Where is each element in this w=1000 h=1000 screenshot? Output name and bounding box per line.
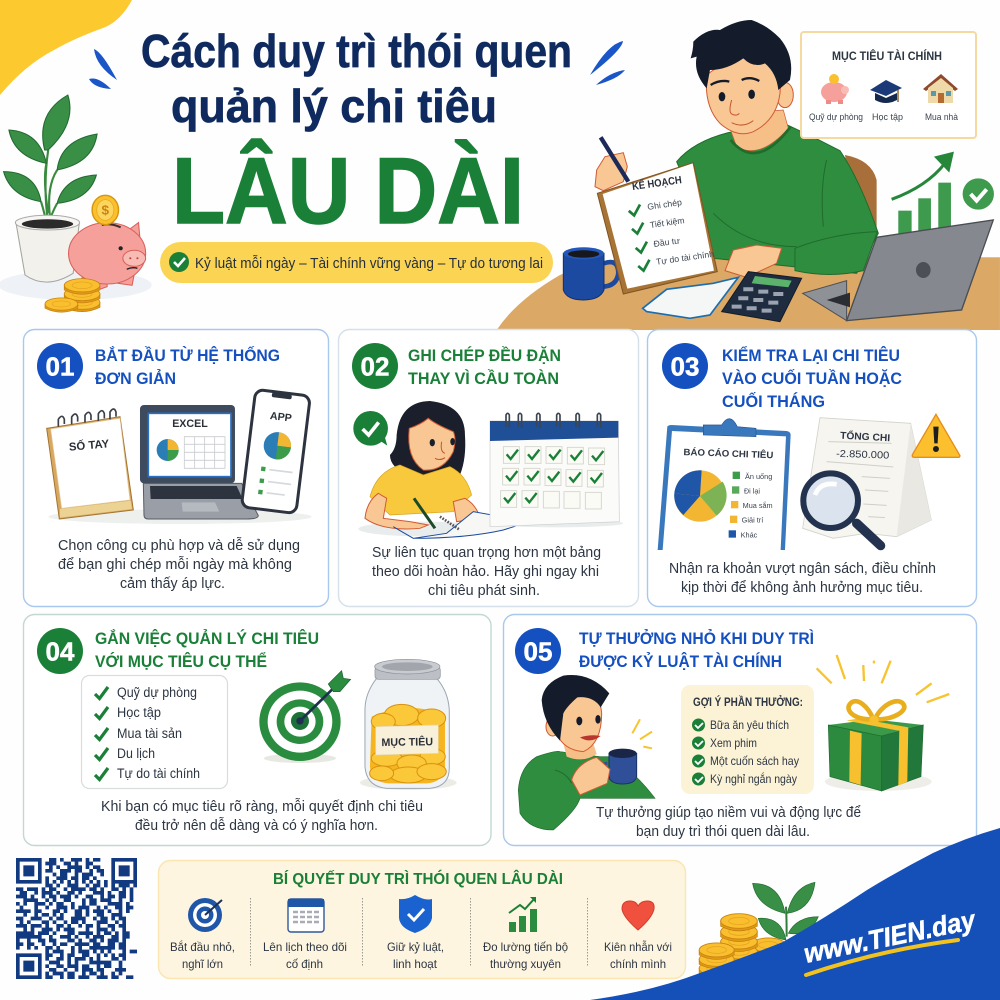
number 05: 05 <box>524 636 552 666</box>
tip labels <box>170 939 672 971</box>
icon: house <box>923 74 958 103</box>
text 01: Chọn công cụ phù hợp và dễ sử dụng <box>58 537 300 554</box>
illustration: desk, man planning, laptop <box>497 20 1000 330</box>
text 01: cảm thấy áp lực. <box>120 576 225 592</box>
illustration: plant, piggy bank and coins <box>0 95 152 312</box>
clipboard with plan <box>597 163 717 294</box>
calendar <box>490 413 623 527</box>
title <box>141 25 572 243</box>
heading 03: VÀO CUỐI TUẦN HOẶC <box>722 368 902 388</box>
heading 03 <box>722 346 902 411</box>
text 04: đều trở nên dễ dàng và có ý nghĩa hơn. <box>135 817 378 834</box>
tip labels: chính mình <box>610 957 666 971</box>
hand on book <box>725 245 782 277</box>
number 01 <box>37 343 83 389</box>
reward suggestions: Bữa ăn yêu thích <box>710 718 789 732</box>
heading 05: ĐƯỢC KỶ LUẬT TÀI CHÍNH <box>579 652 782 671</box>
panel: card 02 <box>338 330 638 606</box>
text 02: Sự liên tục quan trọng hơn một bảng <box>372 545 601 561</box>
receipt: -2.850.000 <box>836 449 890 462</box>
checklist box: Mua tài sản <box>117 726 182 741</box>
heading 02: THAY VÌ CẦU TOÀN <box>408 369 559 388</box>
panel: financial goals: Quỹ dự phòng <box>809 112 863 123</box>
text 02 <box>372 545 601 599</box>
checklist box: Tự do tài chính <box>117 766 200 781</box>
checklist box: Học tập <box>117 705 161 720</box>
QR code <box>16 860 137 977</box>
heading 04: VỚI MỤC TIÊU CỤ THỂ <box>95 652 267 671</box>
icon: target <box>188 898 222 932</box>
blue sparks right <box>590 41 625 85</box>
panel: financial goals: Học tập <box>872 112 903 123</box>
illustration: target and jar <box>259 659 457 790</box>
panel: long-term tips <box>158 860 686 978</box>
legend: Đi lại <box>744 486 760 495</box>
title: LÂU DÀI <box>172 137 524 243</box>
panel: card 01 <box>24 330 328 606</box>
reward suggestions: GỢI Ý PHẦN THƯỞNG: <box>693 696 803 709</box>
illustration: plant, piggy bank and coins: $ <box>102 203 110 218</box>
panel: card 03 <box>648 330 976 606</box>
number 05 <box>515 628 561 674</box>
illustration: coins and sprout <box>699 882 818 978</box>
checklist box: Quỹ dự phòng <box>117 685 197 700</box>
laptop excel: EXCEL <box>172 418 208 430</box>
tip labels: Kiên nhẫn với <box>604 939 672 954</box>
text 04 <box>101 798 423 834</box>
reward suggestions <box>681 685 814 794</box>
heading 03: KIỂM TRA LẠI CHI TIÊU <box>722 346 900 365</box>
title: quản lý chi tiêu <box>171 80 497 132</box>
number 04 <box>37 628 83 674</box>
brand: www.TIEN.day: www.TIEN.day <box>801 904 980 969</box>
reward suggestions: Kỳ nghỉ ngắn ngày <box>710 771 797 786</box>
laptop <box>803 220 993 321</box>
panel: card 04 <box>24 614 491 846</box>
panel: card 05 <box>504 614 976 846</box>
clipboard with plan: Đầu tư <box>653 235 681 249</box>
blue corner <box>590 828 1000 1000</box>
receipt: TỔNG CHI <box>840 429 891 444</box>
icon: graduation cap <box>870 80 902 103</box>
hand and pen <box>595 137 628 191</box>
receipt <box>803 418 931 538</box>
clipboard with plan: Tiết kiệm <box>649 215 685 230</box>
heading 05: TỰ THƯỞNG NHỎ KHI DUY TRÌ <box>579 629 814 648</box>
panel: financial goals <box>801 32 976 138</box>
icon: growth chart <box>509 897 537 932</box>
legend: Ăn uống <box>745 472 772 481</box>
icon: piggy <box>821 74 849 104</box>
text 05: Tự thưởng giúp tạo niềm vui và động lực để <box>596 805 861 821</box>
legend: Mua sắm <box>743 501 773 510</box>
panel: financial goals: MỤC TIÊU TÀI CHÍNH <box>832 50 942 63</box>
tip labels: Bắt đầu nhỏ, <box>170 939 235 954</box>
text 03: Nhận ra khoản vượt ngân sách, điều chỉnh <box>669 561 936 577</box>
icon: calendar <box>288 899 324 932</box>
phone <box>241 389 310 514</box>
number 03: 03 <box>671 352 699 382</box>
man <box>677 20 878 274</box>
text 02: theo dõi hoàn hảo. Hãy ghi ngay khi <box>372 564 599 580</box>
clipboard report <box>658 419 791 550</box>
phone: APP <box>269 410 292 425</box>
tip labels: Lên lịch theo dõi <box>263 940 347 954</box>
heading 01: ĐƠN GIẢN <box>95 369 176 388</box>
magnifier <box>803 473 881 546</box>
growth chart and arrow <box>892 152 994 234</box>
heading 04 <box>95 629 319 671</box>
blue sparks left <box>89 49 117 89</box>
jar with coins: MỤC TIÊU <box>381 735 433 749</box>
text 01 <box>58 537 300 592</box>
panel: financial goals: Mua nhà <box>925 112 959 123</box>
target <box>259 671 351 763</box>
notebook: SỐ TAY <box>68 436 110 454</box>
illustration: gift <box>817 655 949 791</box>
text 03 <box>669 561 936 596</box>
panel: long-term tips: BÍ QUYẾT DUY TRÌ THÓI QUEN LÂU DÀI <box>273 869 563 888</box>
legend: Khác <box>741 530 757 539</box>
title: Cách duy trì thói quen <box>141 25 572 77</box>
book and pen <box>393 498 530 538</box>
clipboard with plan: Ghi chép <box>647 197 683 212</box>
reward suggestions: Một cuốn sách hay <box>710 754 799 768</box>
tagline pill: Kỷ luật mỗi ngày – Tài chính vững vàng – Tự do tương lai <box>195 255 543 272</box>
text 05: bạn duy trì thói quen dài lâu. <box>636 824 810 840</box>
text 01: để bạn ghi chép mỗi ngày mà không <box>58 556 292 573</box>
checklist box: Du lịch <box>117 746 155 761</box>
number 04: 04 <box>46 636 75 666</box>
number 03 <box>662 343 708 389</box>
heading 03: CUỐI THÁNG <box>722 391 825 411</box>
clipboard with plan: KẾ HOẠCH <box>631 173 683 193</box>
tip labels: nghĩ lớn <box>182 957 223 971</box>
notebook <box>47 409 133 519</box>
desk <box>497 257 1000 330</box>
heading 01: BẮT ĐẦU TỪ HỆ THỐNG <box>95 345 280 365</box>
text 04: Khi bạn có mục tiêu rõ ràng, mỗi quyết định chi tiêu <box>101 798 423 815</box>
legend <box>729 472 773 539</box>
number 02 <box>352 343 398 389</box>
illustration: report, receipt, magnifier <box>658 414 960 550</box>
legend: Giải trí <box>742 516 764 525</box>
jar with coins <box>360 659 457 790</box>
icon: heart <box>622 901 654 930</box>
text 03: kịp thời để không ảnh hưởng mục tiêu. <box>681 580 923 596</box>
tip labels: Giữ kỷ luật, <box>387 940 444 954</box>
number 02: 02 <box>361 352 389 382</box>
tip labels: thường xuyên <box>490 957 561 971</box>
heading 02 <box>408 346 561 388</box>
tip labels: cố định <box>286 957 323 971</box>
text 05 <box>596 805 861 840</box>
clipboard report: BÁO CÁO CHI TIÊU <box>683 446 774 460</box>
illustration: girl writing <box>353 401 530 538</box>
icon: shield <box>399 895 432 933</box>
check bubble <box>353 411 388 446</box>
illustration: man with mug <box>518 675 655 830</box>
illustration: notebook, laptop, phone <box>47 389 312 524</box>
open book <box>643 277 738 318</box>
clipboard with plan: Tự do tài chính <box>655 249 715 267</box>
number 01: 01 <box>46 352 74 382</box>
reward suggestions: Xem phim <box>710 736 757 750</box>
warning <box>912 414 960 457</box>
yellow corner blob <box>0 0 132 95</box>
calculator <box>722 272 802 322</box>
heading 01 <box>95 345 280 388</box>
mug <box>563 247 618 300</box>
heading 02: GHI CHÉP ĐỀU ĐẶN <box>408 346 561 365</box>
heading 05 <box>579 629 814 671</box>
laptop excel <box>140 405 258 519</box>
tagline pill <box>160 242 553 283</box>
tip labels: linh hoạt <box>393 957 438 971</box>
girl <box>365 401 480 529</box>
tip labels: Đo lường tiến bộ <box>483 940 568 954</box>
text 02: chi tiêu phát sinh. <box>428 583 540 599</box>
heading 04: GẮN VIỆC QUẢN LÝ CHI TIÊU <box>95 629 319 648</box>
checklist box <box>82 676 228 788</box>
